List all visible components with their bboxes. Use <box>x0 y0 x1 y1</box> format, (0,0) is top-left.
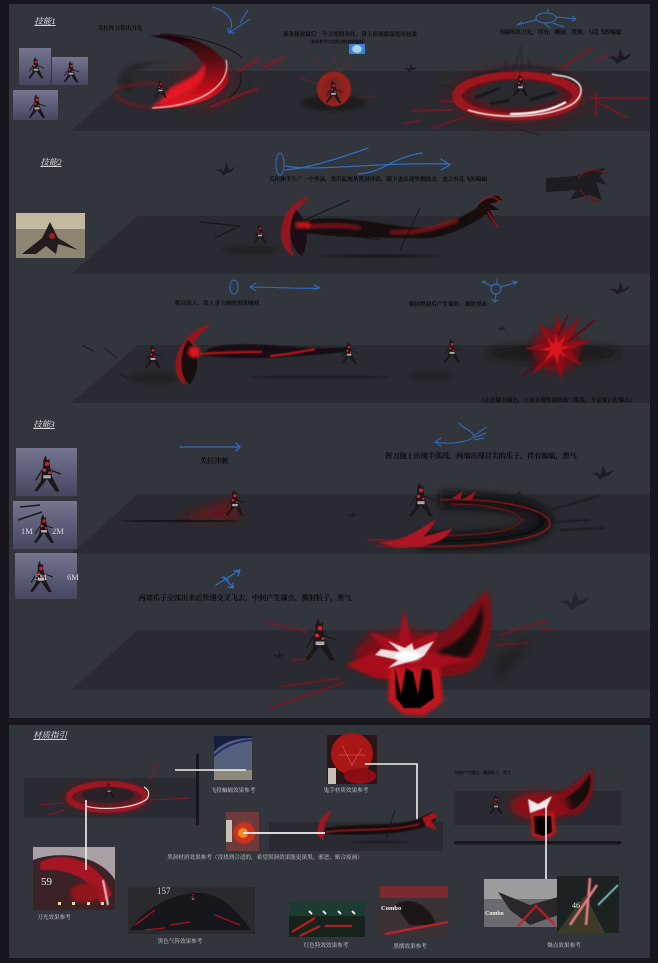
sketch: black hole and waves arrow <box>276 148 450 175</box>
reference: claw hand <box>546 168 607 201</box>
text: skill 2 step 3: 抓回黑洞后产生爆炸，溅射黑血 <box>409 300 488 309</box>
sketch: half arc <box>435 423 486 446</box>
sketch: explosion arrows <box>482 279 517 302</box>
sketch: pull back arrow <box>230 280 320 294</box>
thumbnails: skill 3: 2M <box>52 526 64 536</box>
reference: black hole <box>226 812 259 851</box>
effect: half arc with claws <box>367 482 604 548</box>
effect: pull back <box>82 324 390 385</box>
icon: bat small <box>272 650 286 659</box>
text: skill 1 step 1: 芙拉挥刀带出刀光 <box>98 24 143 32</box>
sketch: ring and scatter arrows <box>517 9 576 28</box>
arrow: skill 1 slash sketch <box>213 7 250 33</box>
text: skill 1 step 2 note: （效果参考以太跃迁的效果编辑） <box>307 38 367 44</box>
reference: ghost hand <box>327 733 377 784</box>
floor: skill 3 part 2 <box>71 630 650 690</box>
connector: burst <box>545 805 547 888</box>
heading: skill 1: 技能1 <box>34 16 56 26</box>
text: skill 2 step 1: 芙拉伸手生产一个黑洞，黑爪猛地从黑洞冲出，脚下也出现黑烟扰动，也会有乱飞的蝙蝠 <box>269 175 487 184</box>
text: black aura label: 黑色气阵效果参考 <box>158 937 203 945</box>
text: black hole label: 黑洞材质效果参考（没找到合适的，希望黑洞效果能更深黑，邪恶，贴合原画） <box>167 853 363 861</box>
reference: burst point left <box>484 879 558 927</box>
text: burst point label: 爆点效果参考 <box>547 941 581 949</box>
reference: red effect <box>289 902 365 937</box>
connector: bats <box>175 769 246 771</box>
effect: final burst <box>265 590 553 716</box>
heading: skill 2: 技能2 <box>40 157 62 167</box>
heading: skill 3: 技能3 <box>33 419 55 429</box>
reference: black smoke <box>380 886 448 937</box>
icon: bat <box>560 590 590 610</box>
icon: bat <box>610 282 630 295</box>
thumbnails: skill 3 <box>13 448 79 599</box>
text: black smoke label: 黑烟效果参考 <box>393 942 427 950</box>
reference: black smoke: Combo <box>381 905 401 912</box>
text: skill 2 note: （注意爆点颜色，主要表现黑洞的血气爆发，不需要白色爆点） <box>479 396 635 405</box>
thumbnails: skill 3: 6M <box>67 572 79 582</box>
mini scene: claw <box>269 810 443 851</box>
connector: slash <box>85 800 87 870</box>
effect: dash <box>120 489 245 522</box>
text: dash label: 芙拉冲刺 <box>200 456 228 465</box>
text: slash label: 刀光效果参考 <box>37 913 71 921</box>
reference: black aura <box>128 886 255 934</box>
reference: slash light: 59 <box>41 876 52 888</box>
thumbnails: skill 1 <box>13 48 88 120</box>
text: half arc description: 挥刀施上出现半弧线，两端出现目尖的爪子，伴有蝙蝠，黑气 <box>385 451 578 461</box>
mini scene: burst <box>454 768 621 844</box>
icon: bat small <box>347 510 359 518</box>
sketch: crossing arrows <box>216 570 240 588</box>
text: bats label: 飞投蝙蝠效果参考 <box>211 786 256 794</box>
text: red effect label: 红色特效效果参考 <box>304 941 349 949</box>
reference thumbnail: blue burst <box>349 44 365 54</box>
reference: black aura: 157 <box>157 886 171 896</box>
reference: burst point right: 46 <box>572 901 580 910</box>
mini scene: ring slash <box>24 754 199 825</box>
floor: skill 2 part 2 <box>71 345 650 403</box>
effect: crescent slash <box>114 34 284 111</box>
connector: ghost hand <box>365 764 417 820</box>
panel: material guide <box>9 725 650 958</box>
arrow: dash <box>180 443 240 451</box>
reference: slash light <box>33 847 115 910</box>
text: ghost hand label: 鬼手材质效果参考 <box>324 786 369 794</box>
text: skill 2 step 2: 抓住敌人，敌人身上缠绕黑线拽回 <box>175 299 259 308</box>
icon: bat <box>592 465 614 480</box>
icon: bat <box>608 48 632 64</box>
panel: skills <box>9 4 650 718</box>
icon: bat fragment <box>498 325 506 331</box>
text: skill 1 step 3: 书圈挥出刀光，伴有，溅射，黑烟，与乱飞的蝙蝠 <box>498 28 622 37</box>
icon: bat small <box>404 63 418 72</box>
floor: skill 3 part 1 <box>71 494 650 554</box>
thumbnail: skill 2 <box>16 213 85 258</box>
floor: skill 1 <box>71 71 650 131</box>
effect: red ring slash <box>402 46 648 135</box>
thumbnails: skill 3: 5M <box>35 572 47 582</box>
reference: burst point right <box>557 876 619 933</box>
text: skill 1 step 2: 预备释放最后一个刀光的动作，身上出现微弱光环包裹 <box>283 30 418 39</box>
floor: skill 2 part 1 <box>71 216 650 274</box>
mini scene: burst: 中间产生爆点，溅射粒子，黑气 <box>455 769 511 775</box>
connector: black hole <box>243 832 325 834</box>
reference: flying bats <box>214 736 252 780</box>
effect: red burst <box>408 314 620 381</box>
text: skill 3 final: 两端爪子全部出来后快速交叉飞去，中间产生爆点，溅射粒子，黑气 <box>139 593 352 603</box>
heading: material guide: 材质指引 <box>33 730 68 740</box>
icon: bat <box>216 162 236 176</box>
effect: aura circle <box>300 55 376 111</box>
reference: burst point left: Combo <box>485 911 504 917</box>
thumbnails: skill 3: 1M <box>21 526 33 536</box>
effect: black hole claw <box>200 196 502 258</box>
